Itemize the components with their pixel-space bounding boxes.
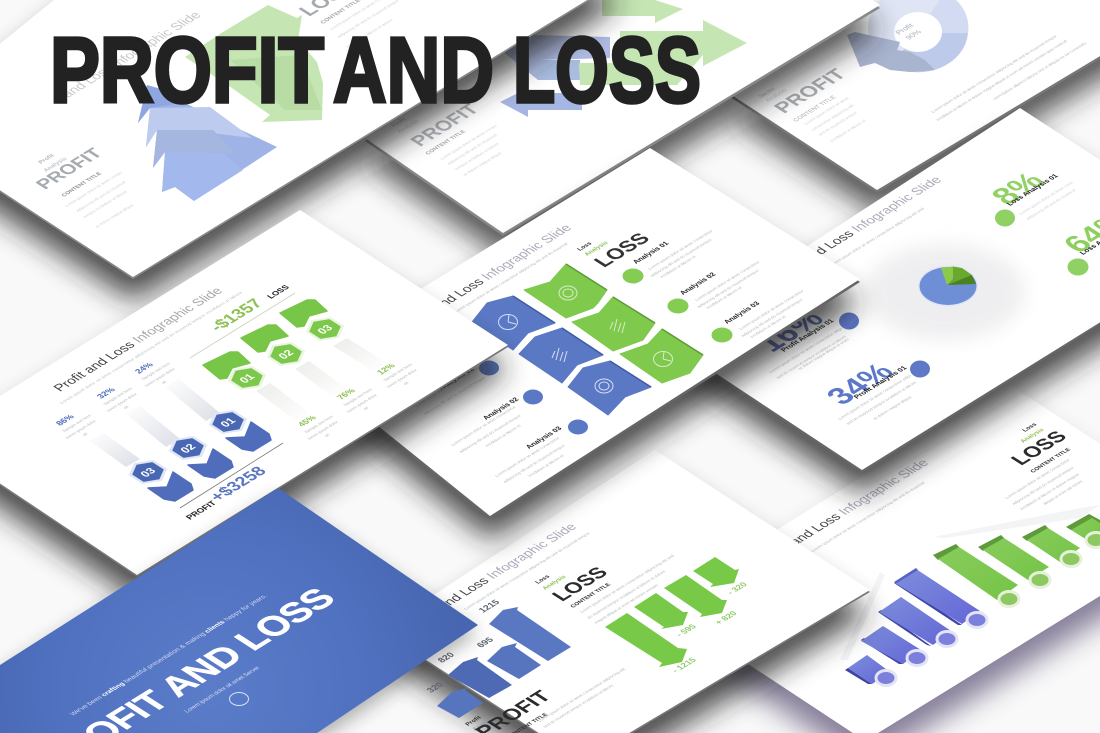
title: [50, 18, 701, 122]
percent: 86: [53, 412, 98, 439]
analysis: loss list: incididunt ut labore et: [659, 254, 698, 279]
total: loss: -$1357: [205, 296, 267, 334]
heading: profit block: Analysis: [765, 88, 789, 103]
tiles: blue: [472, 296, 651, 415]
heading: loss block: Loss: [535, 574, 552, 585]
slide subtitle: Lorem ipsum dolor sit amet consectetur adipiscing elit sed do eiusmod: [810, 480, 926, 553]
analysis: loss list: Lorem ipsum dolor sit amet consectetur: [738, 289, 805, 331]
analysis: profit list: incididunt ut labore et: [527, 453, 566, 478]
heading: profit block: CONTENT TITLE: [793, 95, 838, 123]
callout: 16 percent: Profit Analysis 01: [780, 318, 836, 353]
total: loss: [190, 283, 295, 358]
percent: 76: Sample text here: [342, 387, 374, 407]
title: AND: [333, 18, 494, 122]
callout: 34 percent: et dolore magna aliqua: [872, 395, 913, 421]
percent: 45: [295, 413, 340, 440]
percent: 12: lorem ipsum dolor: [385, 368, 419, 388]
analysis: loss list: adipiscing elit sed do eiusmod tempor: [649, 237, 714, 278]
heading: loss block: LOSS: [1007, 428, 1072, 469]
analysis: loss list: incididunt ut labore et: [749, 314, 788, 339]
title: PROFIT: [50, 18, 324, 122]
heading: loss block: aliqua ut enim ad minim: [1042, 479, 1084, 506]
heading: profit block: Sector: [758, 87, 778, 99]
icons: tile glyphs blue: [498, 314, 613, 393]
percent: 32: [94, 385, 139, 412]
total: loss: LOSS: [265, 283, 292, 300]
percent: 45: sit: [323, 432, 331, 438]
percent: 32: Sample text here: [102, 386, 134, 406]
analysis: profit list: Analysis 01: [437, 367, 476, 391]
percent: 24: 24%: [132, 360, 156, 375]
heading: profit block: PROFIT: [31, 145, 107, 192]
heading: loss block: Loss: [577, 241, 594, 252]
slide subtitle: Lorem ipsum dolor sit amet consectetur adipiscing elit sed do eiusmod tempor incididunt ut labore: [59, 290, 244, 405]
percent: 12: sit: [402, 380, 410, 386]
slide title: Profit and Loss Infographic Slide: [50, 285, 226, 394]
heading: profit block: Analysis: [472, 715, 498, 732]
text block: right: Lorem ipsum dolor sit amet consectetur adipiscing elit sed do eiusmod tempor: [930, 34, 1059, 114]
gear backdrop: [865, 244, 1025, 340]
slide title: Profit and Loss Infographic Slide: [404, 521, 580, 630]
slide subtitle: Lorem ipsum dolor sit amet consectetur adipiscing elit sed: [829, 207, 926, 267]
heading: loss block: Analysis: [542, 574, 568, 591]
percent: 76: lorem ipsum dolor: [345, 393, 379, 413]
arrow values: loss: + 820: [712, 609, 739, 626]
slide title: Profit and Loss Infographic Slide: [399, 222, 575, 331]
donut chart: Profit: [893, 21, 916, 36]
slide subtitle: Lorem ipsum dolor sit amet consectetur adipiscing elit sed do eiusmod tempor: [463, 531, 592, 611]
heading: profit block: Profit: [38, 154, 56, 165]
tile edges: blue: [513, 296, 651, 387]
heading: profit block: et dolore magna aliqua: [94, 203, 135, 229]
heading: loss block: LOSS: [548, 564, 613, 605]
percent: 32: lorem ipsum dolor: [105, 392, 139, 412]
panel: top middle arrows slide: [365, 0, 880, 257]
heading: profit block: Lorem ipsum dolor sit amet consectetur adipiscing elit: [537, 667, 627, 723]
percent: 45: 45%: [295, 413, 319, 428]
heading: profit block: Profit: [391, 117, 408, 128]
total: profit: +$3258: [205, 464, 271, 504]
percent: 12: [374, 361, 419, 388]
arrows: green: [185, 5, 323, 122]
analysis: profit list: incididunt ut labore et: [484, 423, 523, 448]
callout: 34 percent: 34%: [819, 358, 901, 410]
title: LOSS: [513, 18, 701, 122]
cover subtitle: Lorem ipsum dolor sit amet Server: [184, 666, 262, 714]
icons: tile glyphs: [559, 286, 672, 366]
panel: middle left hexagon slide: [0, 210, 508, 599]
callout: 34 percent: sed do eiusmod tempor incididunt ut labore: [845, 380, 918, 426]
hexagons: green: 03: [315, 323, 336, 336]
percent: 12: Sample text here: [382, 362, 414, 382]
arrow values: loss: - 320: [724, 580, 750, 596]
heading: profit block: PROFIT: [770, 66, 852, 117]
heading: loss block: incididunt ut labore et dolore magna: [1019, 472, 1081, 511]
analysis: profit list: Lorem ipsum dolor sit amet consectetur: [450, 405, 517, 447]
icon: green circle: [995, 210, 1015, 226]
heading: loss block: CONTENT TITLE: [1030, 447, 1073, 474]
heading: profit block: [31, 145, 135, 229]
tags: blue: [148, 422, 271, 501]
heading: profit block: Analysis: [397, 119, 421, 134]
callout: 16 percent: Lorem ipsum dolor sit amet consectetur adipi: [768, 327, 844, 374]
heading: profit block: CONTENT TITLE: [425, 129, 468, 156]
arrows: blue: [497, 25, 610, 117]
heading: profit block: adipiscing elit sed do eiusmod: [75, 180, 127, 213]
arrow tree: blue: [138, 85, 277, 201]
arrow values: loss: - 1215: [669, 656, 699, 674]
heading: profit block: sed do eiusmod tempor: [817, 110, 859, 137]
percent: 32: sit: [122, 404, 130, 410]
tags: green: [203, 300, 327, 379]
analysis: profit list: adipiscing elit sed do eiusmod tempor: [458, 413, 523, 454]
heading: profit block: [465, 667, 627, 733]
callout: 16 percent: sed do eiusmod tempor incididunt ut labore: [775, 334, 848, 380]
cover tagline: We've been crafting beautiful presentation & making clients happy for years.: [69, 593, 269, 717]
icons: green circles: [999, 532, 1100, 606]
percent: 24: lorem ipsum dolor: [143, 367, 177, 387]
heading: loss block: [535, 554, 676, 625]
callout: 8 percent: [984, 167, 1077, 226]
heading: loss block: do eiusmod tempor incididunt ut labore et dolore: [586, 569, 667, 620]
heading: loss block: [1004, 422, 1084, 511]
heading: loss block: Lorem ipsum dolor sit amet consectetur adipiscing elit sed: [579, 554, 676, 614]
callout: 16 percent: et dolore magna aliqua ut enim: [797, 337, 851, 371]
arrows: green: [579, 0, 747, 85]
analysis: loss list: adipiscing elit sed do eiusmod tempor: [696, 268, 761, 309]
arrow values: loss: [669, 580, 750, 674]
analysis: loss list: Lorem ipsum dolor sit amet consectetur: [647, 229, 714, 271]
percent: 86: Sample text here: [61, 413, 93, 433]
analysis: profit list: adipiscing elit sed do eiusmod tempor: [422, 375, 487, 416]
heading: profit block: Lorem ipsum dolor sit amet consec: [439, 123, 499, 161]
hexagons: green: 02: [276, 348, 297, 361]
donut chart: [847, 0, 968, 72]
heading: loss block: CONTENT TITLE: [570, 582, 613, 609]
analysis: profit list: adipiscing elit sed do eiusmod tempor: [502, 443, 567, 484]
slide title: Profit and Loss Infographic Slide: [756, 457, 932, 566]
text block: right: incididunt ut labore et dolore magna aliqua ut enim ad minim veniam quis nostrud: [935, 39, 1069, 122]
arrows: green loss: [605, 557, 739, 667]
analysis: profit list: Analysis 02: [482, 397, 521, 421]
heading: loss block: Lorem ipsum dolor sit amet consectetur: [1004, 458, 1071, 500]
heading: loss block: adipiscing elit sed do eiusmod tempor: [1011, 465, 1076, 506]
hexagons: blue: [124, 407, 252, 487]
panel: middle tile grid slide: [300, 148, 860, 540]
arrow values: profit: 820: [435, 651, 457, 664]
analysis: profit list: Lorem ipsum dolor sit amet consectetur: [494, 436, 561, 478]
percent: 86: sit: [81, 431, 89, 437]
percent: 24: sit: [160, 379, 168, 385]
percent: 45: Sample text here: [303, 414, 335, 434]
fade bars: [90, 338, 387, 467]
arrow: donut arrow: [847, 32, 935, 72]
heading: loss block: Analysis: [1020, 427, 1046, 444]
heading: loss block: [295, 0, 401, 49]
percent: 45: lorem ipsum dolor: [306, 420, 340, 440]
analysis: loss list: Analysis 02: [679, 272, 718, 296]
panel: bottom right bar chart slide: [657, 385, 1100, 733]
bar chart: blue bars: [845, 568, 987, 686]
bar chart: green bars: [933, 514, 1100, 606]
callout: 8 percent: adipiscing elit sed do eiusmod: [1025, 188, 1077, 221]
heading: loss block: magna aliqua ut enim ad minim veniam: [593, 583, 660, 625]
heading: profit block: adipiscing elit sed do eiusmod: [446, 133, 498, 166]
arrow values: profit: [424, 598, 502, 694]
heading: profit block: [758, 66, 868, 143]
heading: profit block: tempor incididunt ut labore: [454, 141, 501, 171]
decorative streak: [933, 505, 1100, 538]
donut chart: 90%: [903, 28, 924, 41]
tiles: green: [524, 264, 703, 383]
percent: 86: lorem ipsum dolor: [64, 419, 98, 439]
percent: 76: sit: [362, 405, 370, 411]
percent: 24: Sample text here: [140, 361, 172, 381]
heading: loss block: Analysis: [584, 240, 610, 257]
analysis: loss list: Analysis 03: [723, 301, 762, 325]
analysis: loss list: adipiscing elit sed do eiusmod tempor: [740, 297, 805, 338]
analysis: profit list: Analysis 03: [525, 426, 564, 450]
slide title: and Loss Infographic Slide: [58, 9, 204, 100]
heading: loss block: LOSS: [590, 230, 655, 271]
arrow values: loss: - 595: [673, 622, 699, 638]
callout: 16 percent: 16%: [749, 305, 831, 357]
hexagons: green: [223, 314, 349, 393]
callout: 34 percent: Lorem ipsum dolor sit amet consectetur adipi: [837, 374, 913, 421]
percent: 76: [334, 386, 379, 413]
heading: profit block: et dolore magna aliqua: [462, 151, 503, 177]
heading: profit block: [391, 101, 503, 177]
total: profit: [180, 443, 283, 521]
panel: top left tree arrows slide: [0, 0, 620, 301]
slide title: Profit and Loss Infographic Slide: [769, 174, 945, 283]
percent: 12: 12%: [374, 361, 398, 376]
callout: 8 percent: 8%: [984, 167, 1051, 210]
total: profit: PROFIT: [183, 499, 219, 521]
analysis: profit list: [414, 360, 588, 484]
tile edges: green: [566, 264, 703, 355]
text block: right: exercitation ullamco laboris nisi ut aliquip ex ea commodo: [992, 41, 1088, 101]
arrow values: profit: 320: [424, 681, 446, 694]
arrows: blue profit: [437, 607, 571, 718]
arrow values: profit: 1215: [476, 598, 502, 614]
heading: profit block: Profit: [465, 716, 483, 727]
hexagons: blue: 01: [218, 416, 239, 429]
icon: blue circle: [910, 360, 930, 378]
heading: profit block: Lorem ipsum dolor sit amet consec: [64, 170, 124, 208]
slide subtitle: Lorem ipsum dolor sit amet consectetur adipiscing elit sed do eiusmod: [453, 241, 569, 314]
percent: 76: 76%: [334, 386, 358, 401]
heading: profit block: CONTENT TITLE: [61, 171, 104, 198]
analysis: loss list: incididunt ut labore et: [705, 285, 744, 310]
pie chart: [918, 266, 978, 306]
heading: profit block: incididunt ut labore et: [829, 118, 868, 143]
icon: blue circle: [839, 312, 859, 330]
heading: profit block: consectetur adipiscing elit: [810, 103, 856, 132]
percent: 86: 86%: [53, 412, 77, 427]
callout: 8 percent: Lorem ipsum dolor sit amet cons: [1018, 181, 1074, 216]
heading: profit block: PROFIT: [407, 101, 484, 150]
callout: 34 percent: Profit Analysis 01: [853, 365, 909, 400]
panel: bottom middle arrows slide: [380, 450, 870, 733]
panel: top right donut slide: [730, 0, 1100, 214]
callout: 34 percent: [819, 358, 930, 426]
analysis: loss list: [622, 229, 805, 342]
analysis: loss list: Analysis 01: [632, 241, 671, 265]
analysis: loss list: Lorem ipsum dolor sit amet consectetur: [694, 260, 761, 302]
heading: loss block: incididunt ut labore et dolore: [345, 18, 395, 49]
heading: profit block: Lorem ipsum dolor sit amet: [803, 96, 851, 126]
hexagons: blue: 02: [178, 442, 199, 455]
heading: profit block: sed do eiusmod tempor incididunt ut labore: [542, 683, 615, 729]
panel: blue cover slide: [0, 488, 478, 733]
icon: green circle: [1068, 258, 1088, 276]
callout: 8 percent: Loss Analysis 01: [1006, 173, 1060, 207]
icon: cover circle: [230, 692, 248, 706]
percent: 24: [132, 360, 177, 387]
icons: blue circles: [876, 612, 987, 686]
heading: loss block: Loss: [1022, 422, 1039, 433]
hexagons: green: 01: [237, 372, 258, 385]
analysis: profit list: Lorem ipsum dolor sit amet consectetur: [414, 366, 481, 408]
percent: 32: 32%: [94, 385, 118, 400]
heading: profit block: tempor incididunt ut labore: [82, 189, 129, 219]
callout: 16 percent: [749, 305, 859, 380]
panel: middle right pie slide: [664, 108, 1100, 494]
hexagons: blue: 03: [138, 466, 159, 479]
heading: profit block: Analysis: [43, 156, 69, 173]
arrow values: profit: 695: [474, 636, 496, 649]
